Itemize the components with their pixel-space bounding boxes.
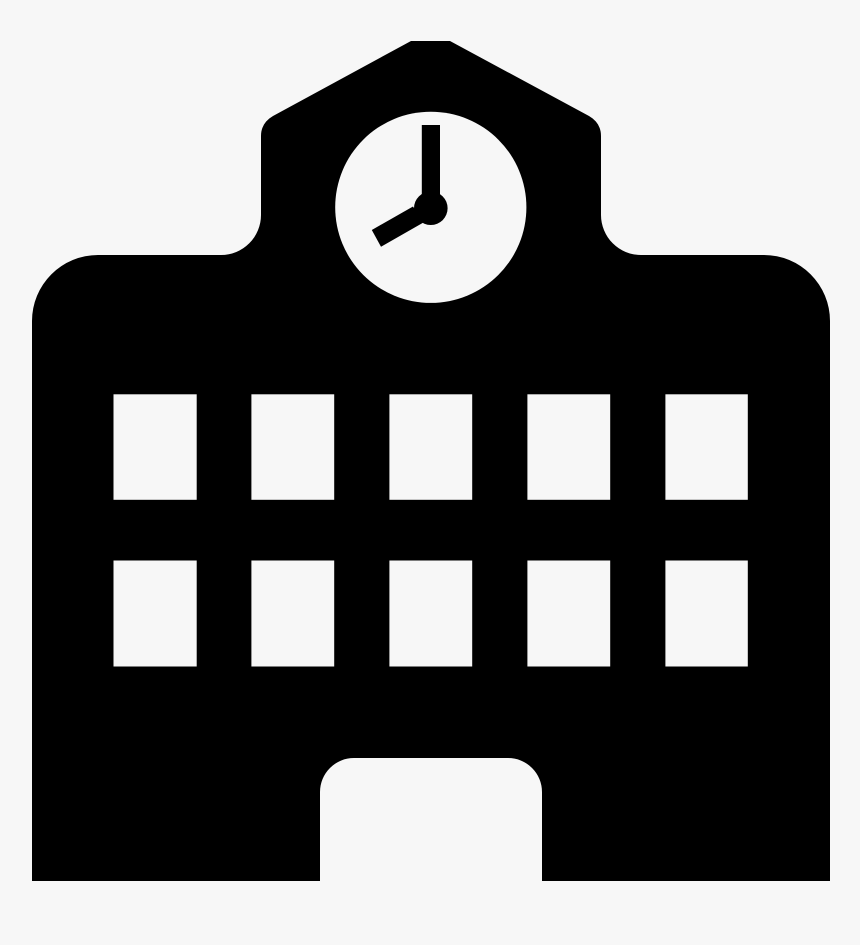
windows: upper row (114, 394, 748, 500)
windows: lower row (114, 560, 748, 666)
clock (335, 112, 526, 303)
